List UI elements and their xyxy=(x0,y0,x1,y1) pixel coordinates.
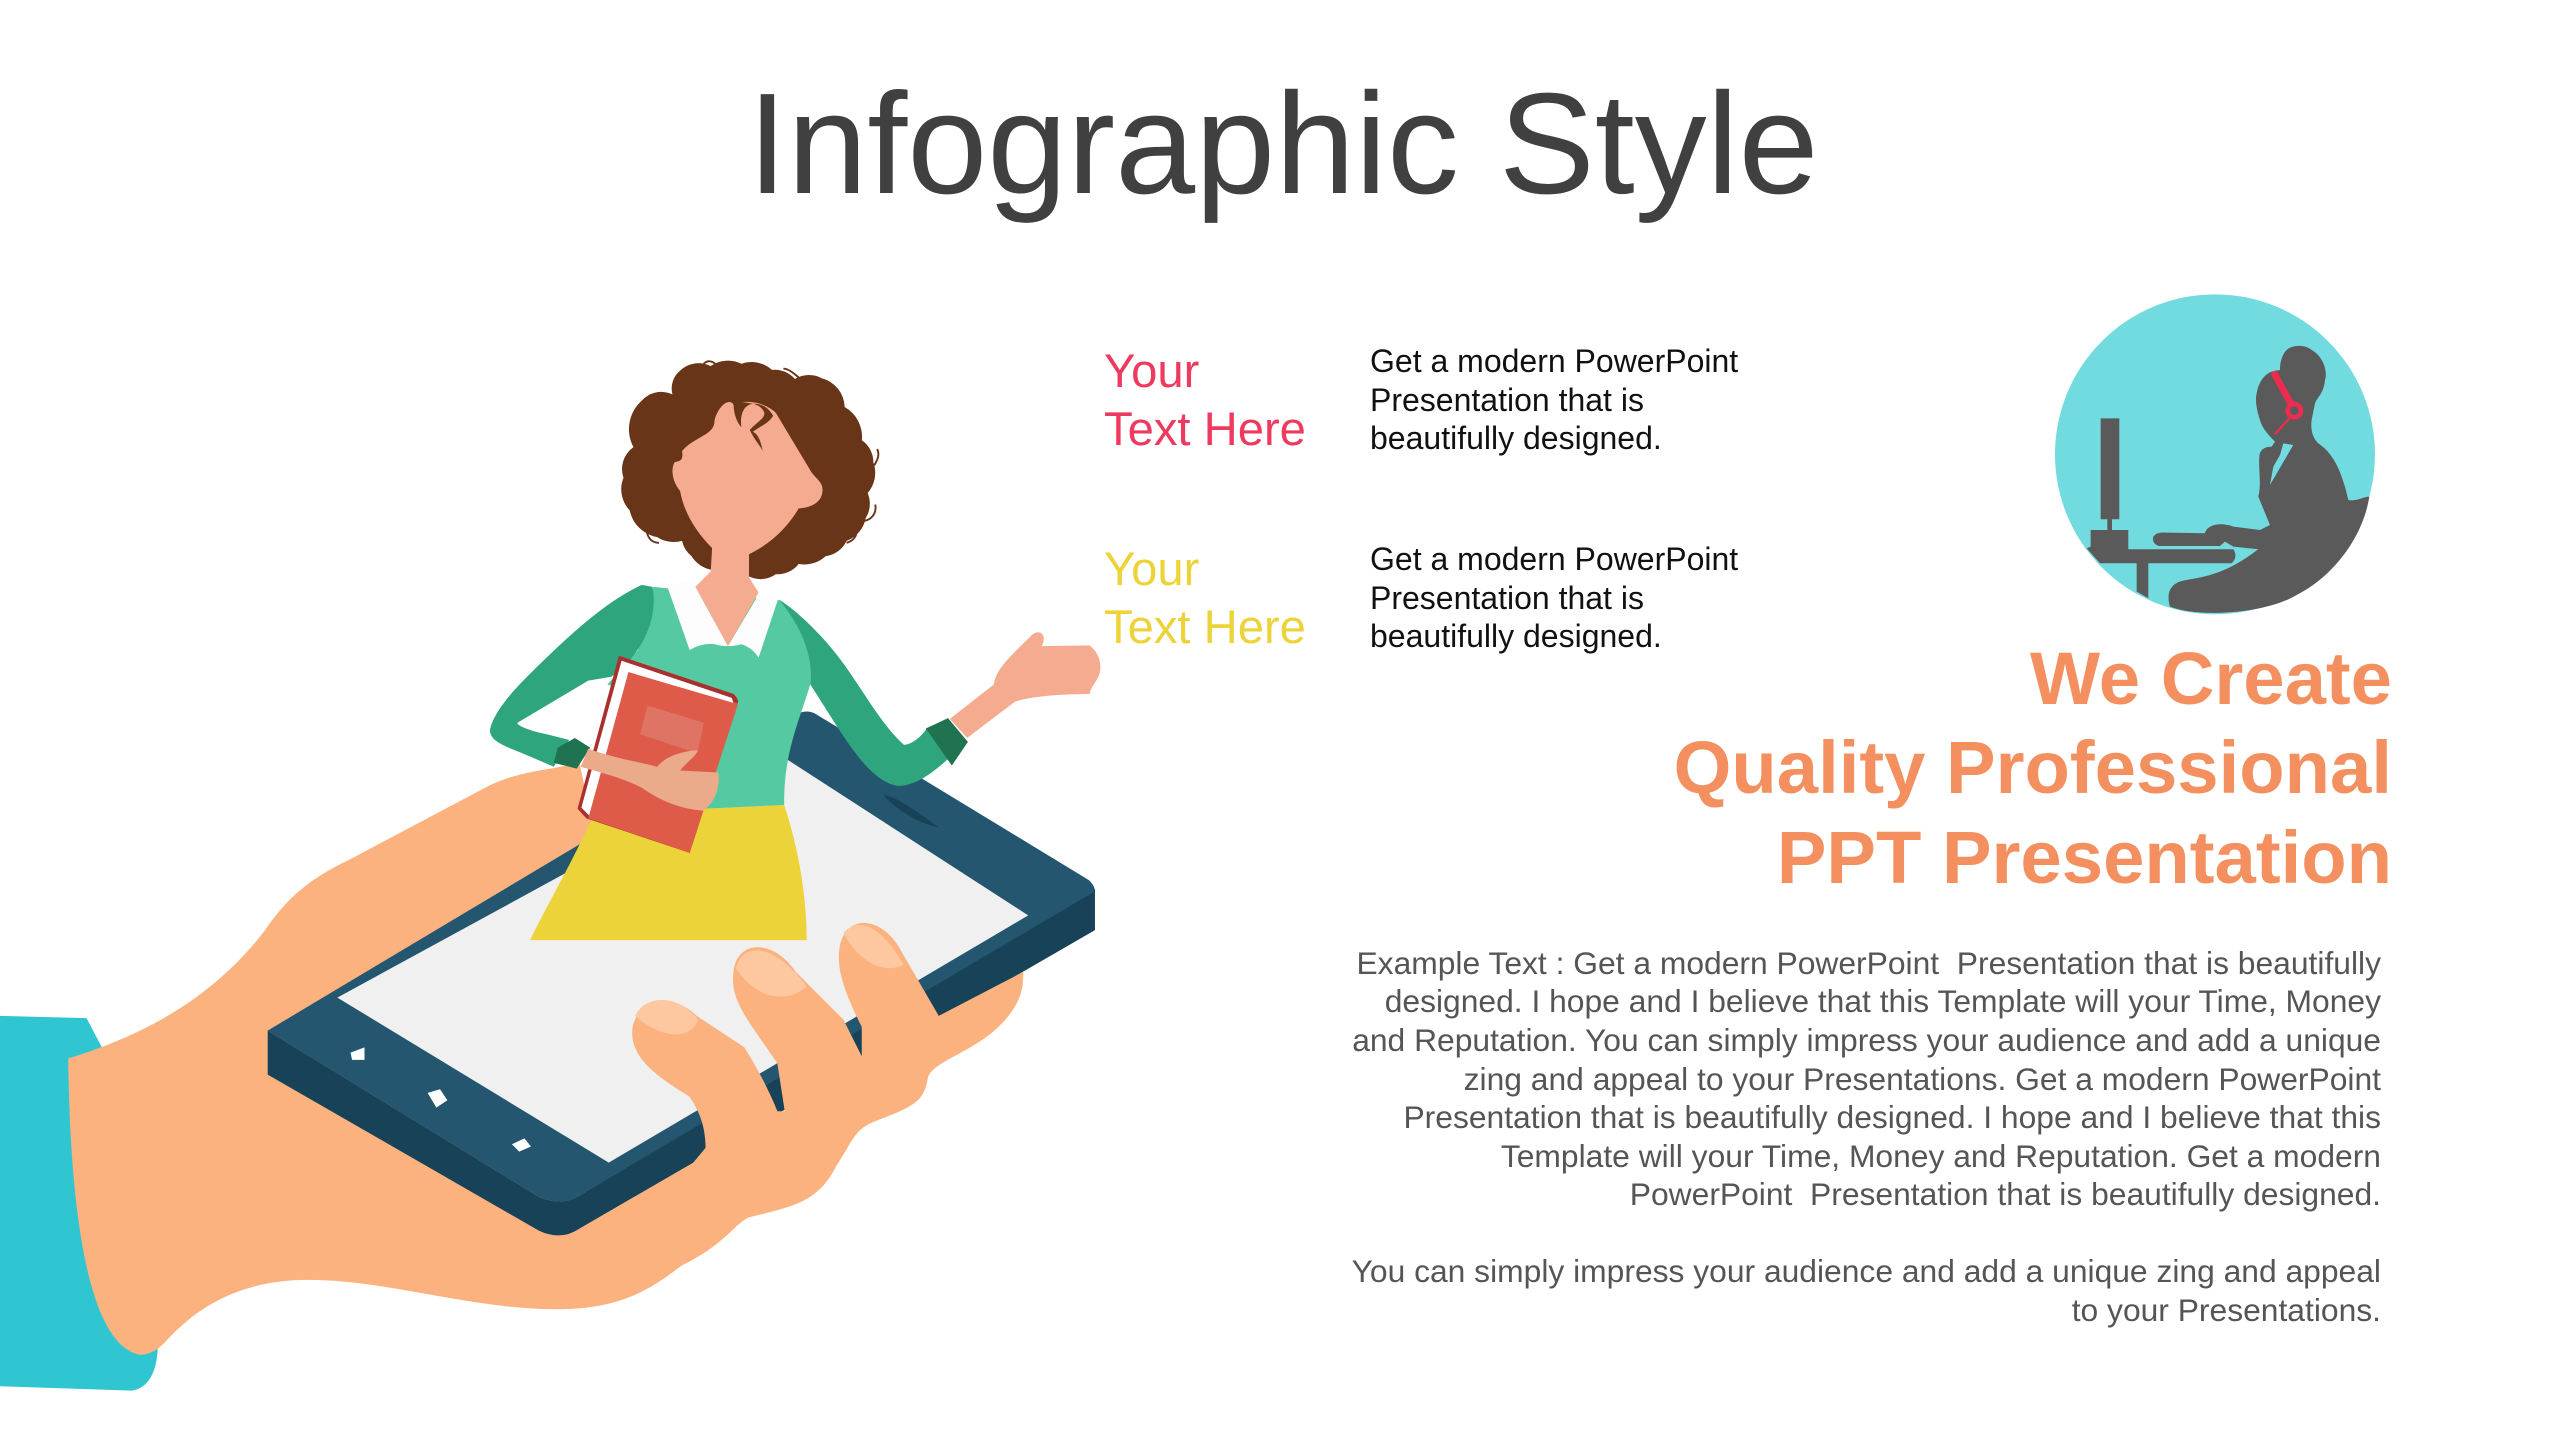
headset xyxy=(2273,372,2301,434)
icon: call centre agent in circle xyxy=(2055,294,2375,614)
face xyxy=(672,402,823,554)
keyboard xyxy=(2153,532,2225,546)
description 1: Presentation that is xyxy=(1370,382,1644,418)
phone xyxy=(268,712,1095,1235)
right forearm and hand xyxy=(950,632,1100,738)
sleeve xyxy=(0,1016,158,1391)
skirt xyxy=(530,805,807,940)
left cuff xyxy=(554,738,590,769)
body text: You can simply impress your audience and add a unique zing and appeal xyxy=(1352,1253,2381,1289)
illustration: hand holding phone xyxy=(0,712,1095,1391)
heading xyxy=(1674,637,2392,899)
body text: designed. I hope and I believe that this Template will your Time, Money xyxy=(1385,983,2381,1019)
description 2: Presentation that is xyxy=(1370,580,1644,616)
description 1: beautifully designed. xyxy=(1370,420,1662,456)
title: Infographic Style xyxy=(747,64,1819,224)
body text: zing and appeal to your Presentations. Get a modern PowerPoint xyxy=(1464,1061,2381,1097)
neck gap xyxy=(2270,443,2293,485)
right cuff xyxy=(926,718,968,766)
description 2: beautifully designed. xyxy=(1370,618,1662,654)
illustration: woman xyxy=(490,361,1100,940)
heading: We Create xyxy=(2030,637,2392,720)
hand back xyxy=(68,763,748,1355)
label 1: Text Here xyxy=(1104,403,1306,456)
body text: PowerPoint Presentation that is beautifully designed. xyxy=(1630,1176,2381,1212)
heading: Quality Professional xyxy=(1674,726,2392,809)
torso xyxy=(607,587,811,809)
heading: PPT Presentation xyxy=(1777,816,2392,899)
label 1: Your xyxy=(1104,345,1199,398)
hair xyxy=(621,361,878,579)
body text xyxy=(1352,945,2381,1328)
label 2: Your xyxy=(1104,543,1199,596)
description 1: Get a modern PowerPoint xyxy=(1370,343,1738,379)
body text: and Reputation. You can simply impress your audience and add a unique xyxy=(1352,1022,2381,1058)
book xyxy=(578,656,738,853)
forelock xyxy=(734,401,773,451)
left forearm holding book xyxy=(581,749,719,811)
left sleeve xyxy=(490,585,654,767)
right sleeve xyxy=(779,599,948,786)
body text: Template will your Time, Money and Reputation. Get a modern xyxy=(1501,1138,2381,1174)
neck xyxy=(695,539,759,646)
label 2: Text Here xyxy=(1104,601,1306,654)
agent silhouette xyxy=(2169,346,2369,613)
collar xyxy=(667,577,778,658)
body text: Presentation that is beautifully designed. I hope and I believe that this xyxy=(1403,1099,2381,1135)
monitor and desk xyxy=(2087,418,2235,598)
body text: to your Presentations. xyxy=(2072,1292,2381,1328)
body text: Example Text : Get a modern PowerPoint Presentation that is beautifully xyxy=(1356,945,2381,981)
description 2: Get a modern PowerPoint xyxy=(1370,541,1738,577)
hand front with fingers xyxy=(623,923,1023,1265)
